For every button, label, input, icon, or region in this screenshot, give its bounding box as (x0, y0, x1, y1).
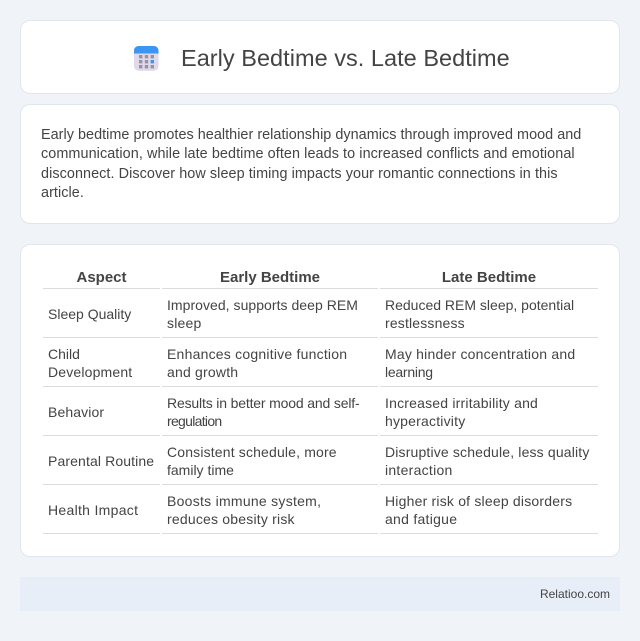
intro text: Early bedtime promotes healthier relationship dynamics through improved mood and (41, 127, 581, 143)
row: Child Development: Enhances cognitive function (167, 346, 347, 362)
intro text: disconnect. Discover how sleep timing impacts your romantic connections in this (41, 166, 558, 182)
row: Parental Routine: interaction (385, 462, 453, 478)
row: Child Development: learning (385, 364, 433, 380)
intro panel (20, 104, 620, 224)
column heading: Late Bedtime: Late Bedtime (442, 269, 536, 286)
title: Early Bedtime vs. Late Bedtime (181, 45, 510, 71)
icon: calendar (134, 46, 158, 71)
row: Sleep Quality: Improved, supports deep REM (167, 297, 358, 313)
intro text (41, 127, 581, 201)
row: Sleep Quality: Sleep Quality (48, 306, 131, 322)
row: Child Development: May hinder concentration and (385, 346, 575, 362)
intro text: communication, while late bedtime often leads to increased conflicts and emotional (41, 146, 575, 162)
row: Health Impact: Boosts immune system, (167, 493, 321, 509)
column heading: Early Bedtime: Early Bedtime (220, 269, 320, 286)
row: Health Impact (48, 493, 572, 527)
row: Health Impact: Health Impact (48, 502, 138, 518)
header card (20, 20, 620, 94)
row: Health Impact: reduces obesity risk (167, 511, 295, 527)
row: Behavior: Behavior (48, 404, 104, 420)
row: Sleep Quality (48, 297, 574, 331)
row: Sleep Quality: restlessness (385, 315, 465, 331)
row: Child Development: Child (48, 346, 80, 362)
footer (20, 577, 620, 611)
row: Sleep Quality: Reduced REM sleep, potential (385, 297, 574, 313)
row: Behavior: regulation (167, 413, 222, 429)
row: Parental Routine: Parental Routine (48, 453, 154, 469)
row: Child Development (48, 346, 575, 380)
row: Child Development: and growth (167, 364, 238, 380)
column heading: Aspect: Aspect (76, 269, 127, 286)
row: Health Impact: and fatigue (385, 511, 457, 527)
row: Behavior: Increased irritability and (385, 395, 538, 411)
row: Parental Routine: family time (167, 462, 234, 478)
row: Child Development: Development (48, 364, 132, 380)
row: Health Impact: Higher risk of sleep disorders (385, 493, 572, 509)
row: Behavior: Results in better mood and self- (167, 395, 360, 411)
row: Parental Routine (48, 444, 590, 478)
row: Behavior (48, 395, 538, 429)
row: Parental Routine: Disruptive schedule, less quality (385, 444, 590, 460)
row: Parental Routine: Consistent schedule, more (167, 444, 337, 460)
table panel (20, 244, 620, 557)
footer credit: Relatioo.com (540, 587, 610, 601)
row: Sleep Quality: sleep (167, 315, 201, 331)
intro text: article. (41, 185, 84, 201)
row: Behavior: hyperactivity (385, 413, 465, 429)
